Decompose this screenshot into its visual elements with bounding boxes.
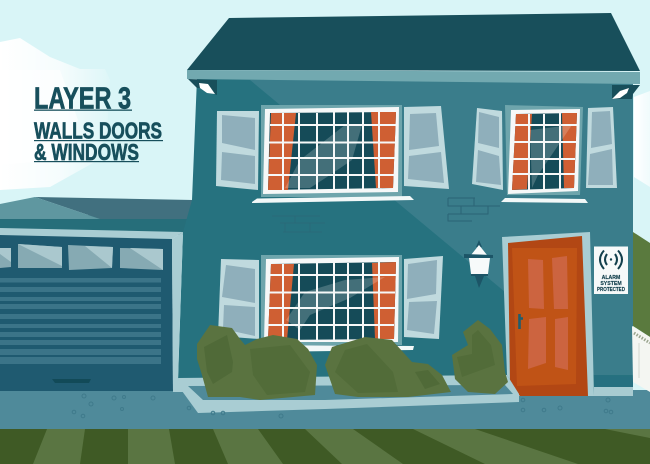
alarm sign text: ALARM [602,275,620,281]
soffit light right [612,88,629,99]
subtitle [34,118,163,165]
alarm sign text [597,275,625,293]
white fence [632,326,650,392]
lower window sill [260,345,414,352]
roof [187,13,640,99]
lower right shutter [404,256,443,339]
garage door [0,228,183,391]
soffit light left [199,83,215,94]
upper window right sill [501,198,588,203]
bush left [197,325,317,400]
house wall [178,78,633,396]
planter border [178,375,519,413]
bush middle [325,337,451,397]
bush right [452,320,508,394]
upper third shutter [472,108,503,190]
pebbles [72,394,613,418]
door step [594,387,633,396]
cloud right [634,91,650,187]
neighbour hedge [633,232,650,337]
bricks [272,198,500,232]
garage trim post [172,232,184,392]
upper middle shutter [404,106,449,189]
lower window [261,255,402,345]
garage roof [0,197,195,235]
lawn [0,429,650,464]
alarm sign text: PROTECTED [597,287,625,293]
driveway and path [0,390,650,430]
upper window sill [252,196,414,203]
door handle [520,314,523,329]
upper window right [505,105,583,195]
upper far right shutter [586,107,617,188]
door [502,232,594,396]
alarm sign [594,246,628,294]
upper left shutter [216,111,259,190]
cloud left [0,38,110,190]
alarm sign text: SYSTEM [600,281,622,287]
subtitle: & WINDOWS [34,139,139,165]
garage door slats [0,278,161,364]
upper window main [261,105,402,197]
lower left shutter [218,259,259,339]
garage handle [52,379,91,383]
lantern [464,240,493,288]
subtitle: WALLS DOORS [34,118,162,144]
garage windows [0,244,163,270]
title: LAYER 3 [34,80,131,116]
